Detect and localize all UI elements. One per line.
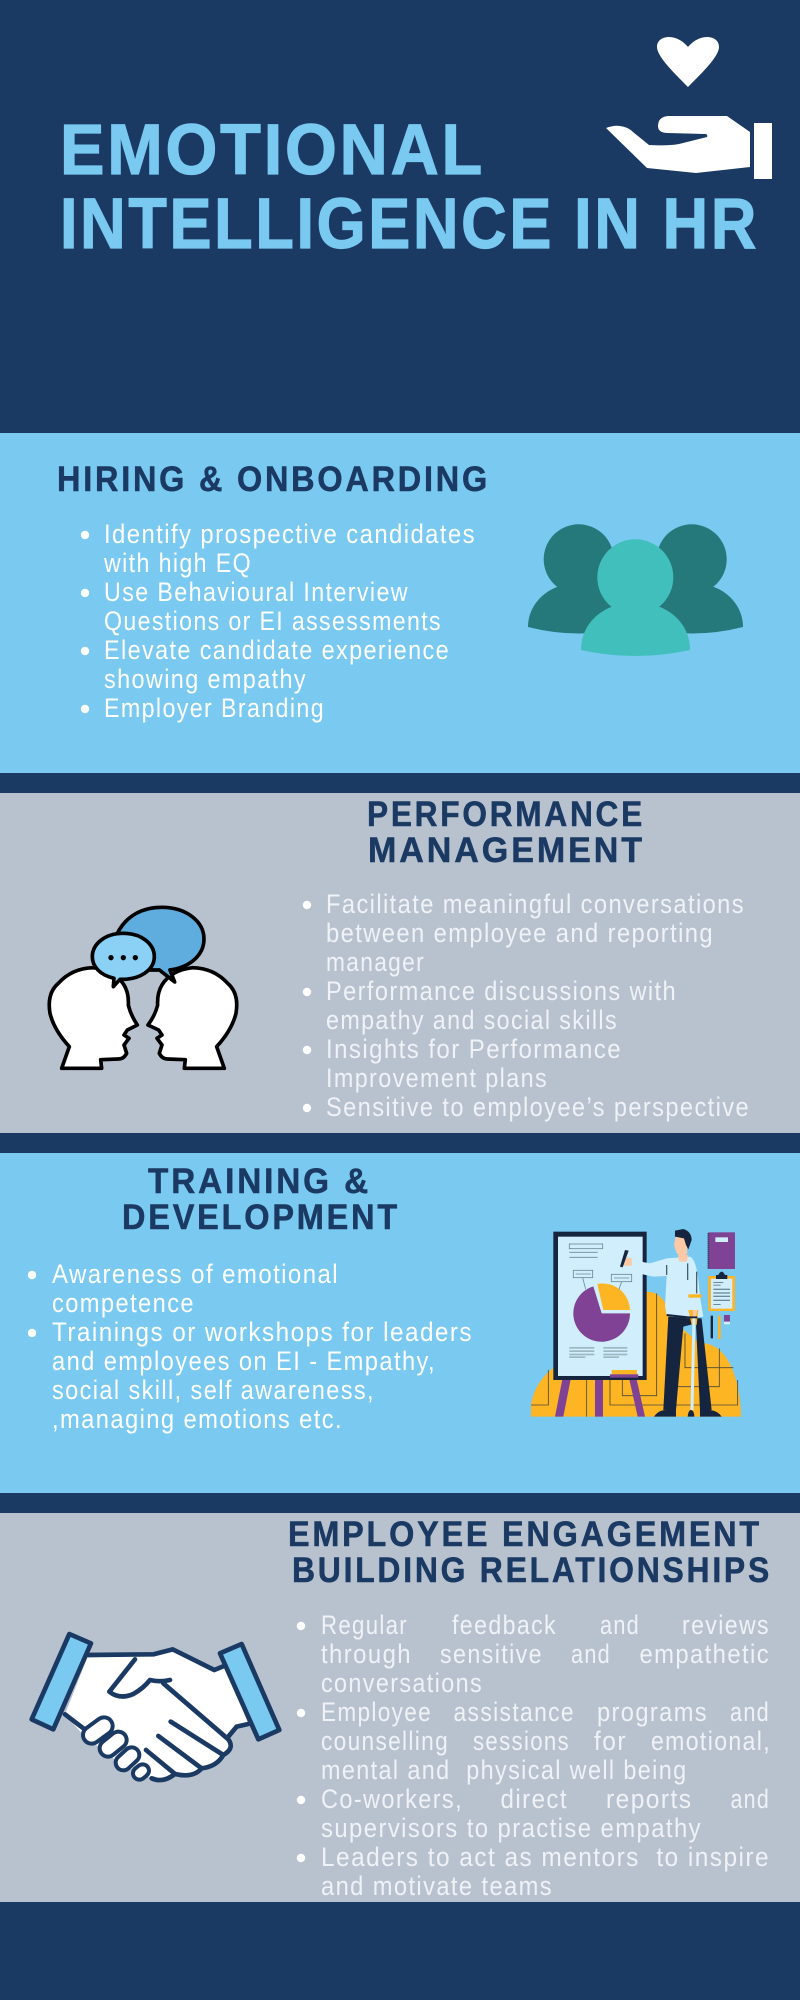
bullet list: engagement: sessions bbox=[473, 1726, 570, 1756]
bullet list: engagement: counselling bbox=[321, 1726, 449, 1756]
bullet list: hiring bbox=[81, 519, 476, 723]
panel: training and development bbox=[0, 1153, 800, 1493]
orange background shapes bbox=[531, 1292, 741, 1417]
heading: training and development: TRAINING & bbox=[148, 1162, 371, 1201]
bullet list: performance: between employee and reporting bbox=[326, 918, 714, 948]
bullet list: hiring: Identify prospective candidates bbox=[104, 519, 476, 549]
heading: training and development bbox=[122, 1162, 400, 1237]
bullet list: training: Trainings or workshops for leaders bbox=[52, 1317, 473, 1347]
bullet list: performance: Performance discussions with bbox=[326, 976, 677, 1006]
board bbox=[553, 1232, 647, 1380]
heading: performance management: PERFORMANCE bbox=[367, 795, 645, 834]
bullet list: engagement: and motivate teams bbox=[321, 1871, 553, 1901]
bullet list: engagement: supervisors to practise empathy bbox=[321, 1813, 702, 1843]
bullet list: engagement: reports bbox=[606, 1784, 692, 1814]
icon: handshake bbox=[32, 1634, 279, 1780]
bullet list: hiring: Elevate candidate experience bbox=[104, 635, 450, 665]
stationery bbox=[711, 1315, 730, 1339]
bullet list: engagement: and bbox=[730, 1784, 770, 1814]
bullet list: hiring: with high EQ bbox=[103, 548, 252, 578]
notebook bbox=[708, 1232, 735, 1269]
bullet list: engagement: through bbox=[321, 1639, 412, 1669]
bullet list: engagement bbox=[297, 1610, 771, 1901]
bullet list: performance: empathy and social skills bbox=[326, 1005, 618, 1035]
bullet list: engagement: empathetic bbox=[640, 1639, 770, 1669]
icon: group of people bbox=[528, 524, 743, 656]
bullet list: engagement: and bbox=[571, 1639, 611, 1669]
bullet list: performance: Insights for Performance bbox=[326, 1034, 622, 1064]
bullet list: engagement: Employee bbox=[321, 1697, 432, 1727]
bullet list: engagement: sensitive bbox=[440, 1639, 543, 1669]
bullet list: hiring: Employer Branding bbox=[104, 693, 325, 723]
bullet list: engagement: Regular bbox=[321, 1610, 408, 1640]
title: EMOTIONAL bbox=[60, 111, 485, 190]
heading: employee engagement bbox=[288, 1515, 772, 1590]
fingers bbox=[92, 1726, 143, 1773]
bullet list: training: competence bbox=[52, 1288, 195, 1318]
bullet list: engagement: direct bbox=[500, 1784, 568, 1814]
heading: employee engagement: EMPLOYEE ENGAGEMENT bbox=[288, 1515, 762, 1554]
bullet list: engagement: Co-workers, bbox=[321, 1784, 463, 1814]
bullet list: engagement: reviews bbox=[682, 1610, 770, 1640]
bullet list: training: Awareness of emotional bbox=[52, 1259, 339, 1289]
icon: hand holding heart bbox=[606, 37, 772, 179]
bullet list: hiring: Questions or EI assessments bbox=[104, 606, 442, 636]
bullet list: engagement: programs bbox=[597, 1697, 708, 1727]
cuffs bbox=[32, 1634, 91, 1729]
heading: training and development: DEVELOPMENT bbox=[122, 1198, 400, 1237]
bullet list: hiring: showing empathy bbox=[104, 664, 307, 694]
bullet list: engagement: and bbox=[730, 1697, 770, 1727]
bullet list: performance: Improvement plans bbox=[326, 1063, 548, 1093]
clipboard bbox=[708, 1276, 735, 1311]
bullet list: training: ,managing emotions etc. bbox=[52, 1404, 343, 1434]
bullet list: engagement: assistance bbox=[454, 1697, 575, 1727]
bullet list: engagement: emotional, bbox=[651, 1726, 771, 1756]
icon: two heads talking bbox=[49, 907, 237, 1068]
bullet list: performance: Facilitate meaningful conversations bbox=[326, 889, 745, 919]
bullet list: performance: Sensitive to employee’s perspective bbox=[326, 1092, 750, 1122]
heading: performance management bbox=[367, 795, 645, 870]
bullet list: engagement: for bbox=[594, 1726, 627, 1756]
title bbox=[60, 111, 759, 264]
bullet list: performance bbox=[303, 889, 750, 1122]
bullet list: engagement: feedback bbox=[452, 1610, 557, 1640]
bullet list: engagement: and bbox=[600, 1610, 640, 1640]
person bbox=[663, 1317, 712, 1410]
heading: hiring and onboarding: HIRING & ONBOARDING bbox=[57, 460, 490, 499]
board chart bbox=[573, 1286, 630, 1342]
bullet list: training: and employees on EI - Empathy, bbox=[52, 1346, 436, 1376]
bullet list: hiring: Use Behavioural Interview bbox=[104, 577, 409, 607]
heading: performance management: MANAGEMENT bbox=[368, 831, 645, 870]
bullet list: training bbox=[28, 1259, 473, 1434]
bullet list: engagement: mental and physical well being bbox=[321, 1755, 688, 1785]
bullet list: performance: manager bbox=[326, 947, 425, 977]
easel legs bbox=[555, 1379, 645, 1417]
panel: performance management bbox=[0, 793, 800, 1133]
panel: employee engagement bbox=[0, 1513, 800, 1902]
illustration: presenter with pie chart board bbox=[531, 1229, 741, 1417]
panel: hiring and onboarding bbox=[0, 433, 800, 773]
bullet list: training: social skill, self awareness, bbox=[52, 1375, 375, 1405]
bullet list: engagement: conversations bbox=[321, 1668, 483, 1698]
